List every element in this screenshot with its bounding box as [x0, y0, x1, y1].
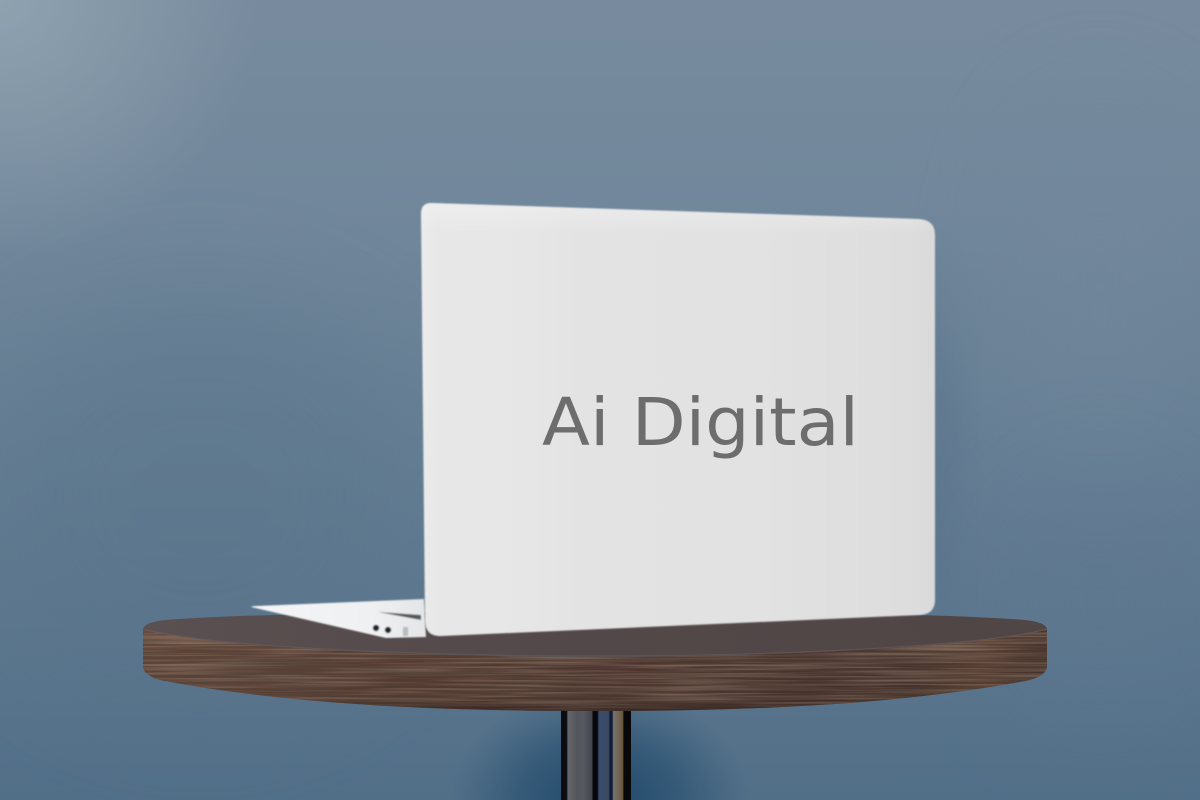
laptop base: [251, 599, 426, 638]
port 2: [385, 627, 391, 633]
table pole: [561, 704, 631, 800]
port 3: [403, 627, 408, 636]
shadow under the table: [450, 690, 750, 800]
laptop shadow on wall: [905, 240, 958, 610]
table edge with wood grain: [143, 628, 1047, 711]
table top: [143, 612, 1047, 657]
laptop lid: [421, 203, 935, 636]
port 1: [373, 625, 379, 631]
round table: [143, 612, 1047, 715]
logo text: Ai Digital: [542, 385, 859, 461]
hinge slot: [378, 612, 421, 620]
table top front highlight: [143, 629, 1047, 656]
base deck: [251, 599, 426, 638]
